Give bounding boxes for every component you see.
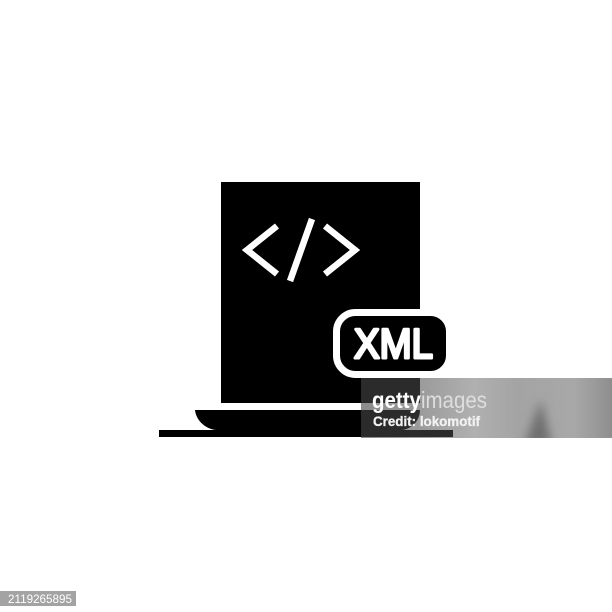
watermark getty text: gettyimages: [372, 387, 487, 413]
watermark: [361, 378, 612, 438]
right chevron: [325, 226, 355, 274]
id background: [0, 591, 76, 606]
watermark fold shading: [524, 400, 552, 445]
image id tag: [0, 591, 76, 606]
badge label: XML: [354, 320, 433, 367]
id number: 2119265895: [8, 592, 72, 606]
laptop screen: [221, 182, 420, 403]
laptop base bowl: [195, 410, 453, 430]
laptop icon: [159, 182, 453, 437]
code symbol: [247, 219, 355, 281]
watermark dark overlay on screen: [361, 378, 420, 403]
badge background: [336, 312, 450, 374]
watermark credit: Credit: lokomotif: [373, 414, 480, 429]
watermark background: [361, 378, 612, 438]
laptop base bar: [159, 430, 453, 437]
watermark dark overlay on base: [361, 410, 420, 430]
XML badge: [336, 312, 450, 374]
slash: [290, 219, 312, 281]
left chevron: [247, 226, 277, 274]
watermark dark overlay on bar: [361, 430, 453, 437]
